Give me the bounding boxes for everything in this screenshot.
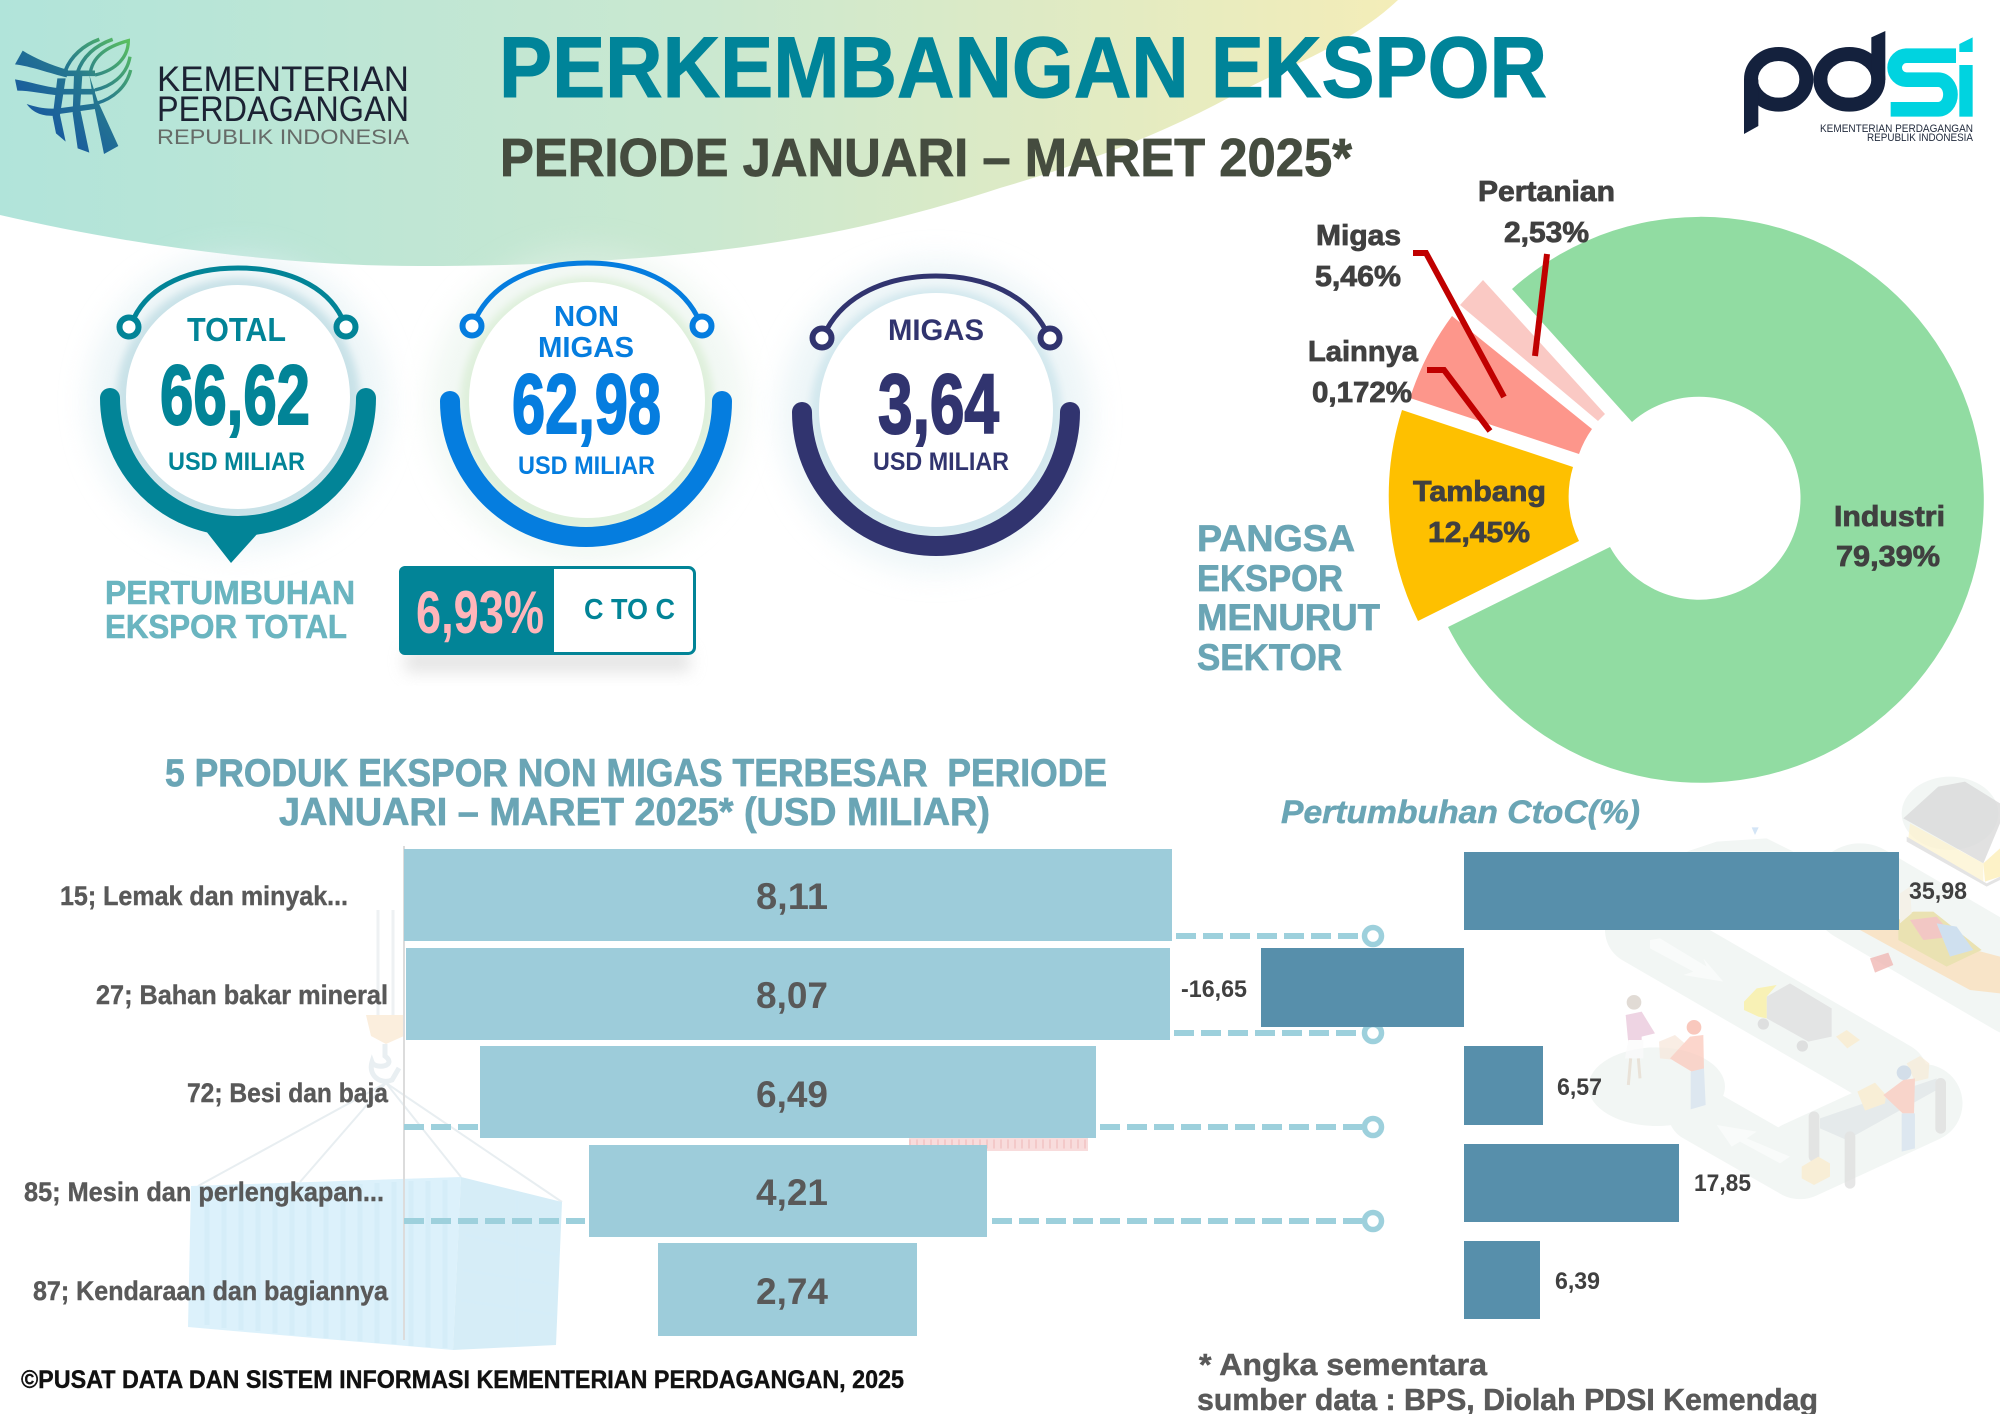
label: Industri: 79,39% bbox=[1836, 541, 1940, 573]
leader lines bbox=[1413, 253, 1547, 431]
bar: Lemak dan minyak: 8,11 bbox=[756, 876, 828, 917]
label: Industri: Industri bbox=[1834, 501, 1945, 533]
label: Industri bbox=[1834, 501, 1945, 573]
heading: pertumbuhan ekspor total: PERTUMBUHAN bbox=[105, 574, 355, 611]
slice: Tambang bbox=[1389, 410, 1579, 621]
icon: Kemendag emblem bbox=[15, 39, 131, 154]
logo wordmark: KEMENTERIAN bbox=[157, 60, 409, 99]
label: Migas bbox=[1315, 220, 1401, 293]
bar: Besi dan baja bbox=[187, 1046, 1096, 1138]
bar: Lemak dan minyak bbox=[60, 849, 1172, 941]
logo caption bbox=[1820, 123, 1974, 144]
slice: Migas bbox=[1410, 316, 1592, 454]
growth callout box bbox=[399, 566, 694, 672]
heading: pangsa ekspor: PANGSA bbox=[1197, 518, 1355, 559]
header gradient banner bbox=[0, 0, 1398, 266]
bar: Lemak dan minyak: 15; Lemak dan minyak... bbox=[60, 881, 348, 911]
gauge pointer bbox=[206, 531, 258, 563]
logo caption: REPUBLIK INDONESIA bbox=[1867, 132, 1974, 144]
unit: USD MILIAR bbox=[518, 452, 655, 480]
slice: Industri bbox=[1448, 217, 1984, 783]
label: Migas: 5,46% bbox=[1315, 261, 1401, 293]
label: Lainnya: Lainnya bbox=[1308, 336, 1419, 368]
growth value: 6,93% bbox=[416, 579, 544, 646]
footnote: source bbox=[1197, 1347, 1818, 1414]
heading: pangsa ekspor: SEKTOR bbox=[1197, 637, 1342, 678]
icon: pdsi letters bbox=[1744, 31, 1973, 134]
gauge arc bbox=[110, 398, 366, 526]
logo caption: KEMENTERIAN PERDAGANGAN bbox=[1820, 123, 1973, 135]
label: Tambang: 12,45% bbox=[1428, 517, 1530, 549]
bar: Kendaraan dan bagiannya bbox=[33, 1243, 917, 1336]
label: NON bbox=[554, 301, 619, 333]
unit: USD MILIAR bbox=[873, 448, 1009, 476]
bar: 6,39 bbox=[1464, 1241, 1600, 1319]
label: Tambang bbox=[1413, 476, 1546, 549]
label: Tambang: Tambang bbox=[1413, 476, 1546, 508]
heading: 5 produk ekspor: JANUARI – MARET 2025* (USD MILIAR) bbox=[279, 791, 990, 834]
logo: PDSI bbox=[1744, 31, 1974, 144]
heading: pangsa ekspor: EKSPOR bbox=[1197, 558, 1343, 599]
gauge arc bbox=[802, 412, 1070, 546]
label: Pertanian: Pertanian bbox=[1478, 176, 1615, 208]
heading: pangsa ekspor: MENURUT bbox=[1197, 597, 1380, 638]
value: 62,98 bbox=[512, 357, 661, 451]
footer: copyright: ©PUSAT DATA DAN SISTEM INFORMASI KEMENTERIAN PERDAGANGAN, 2025 bbox=[21, 1366, 904, 1394]
label: Pertanian: 2,53% bbox=[1504, 217, 1589, 249]
bar: 17,85: 17,85 bbox=[1694, 1170, 1751, 1197]
bar: Besi dan baja: 6,49 bbox=[756, 1074, 828, 1115]
gauge top arc bbox=[462, 263, 712, 336]
footnote: source: * Angka sementara bbox=[1199, 1347, 1488, 1382]
bar: 35,98: 35,98 bbox=[1909, 878, 1967, 905]
label: MIGAS bbox=[538, 332, 634, 364]
logo wordmark bbox=[157, 60, 409, 149]
heading: pertumbuhan ekspor total bbox=[105, 574, 355, 645]
bar: 35,98 bbox=[1464, 852, 1967, 930]
logo wordmark: REPUBLIK INDONESIA bbox=[157, 126, 409, 149]
bar: Mesin dan perlengkapan: 4,21 bbox=[756, 1172, 828, 1213]
connector lines bbox=[404, 846, 1382, 1340]
label: MIGAS bbox=[888, 314, 984, 347]
bar: 6,57 bbox=[1464, 1046, 1602, 1125]
gauge: non migas bbox=[429, 247, 745, 563]
growth basis: C TO C bbox=[584, 594, 675, 626]
label: Pertanian bbox=[1478, 176, 1615, 249]
bar: -16,65 bbox=[1181, 948, 1464, 1027]
bar: Bahan bakar mineral: 27; Bahan bakar mineral bbox=[96, 980, 388, 1010]
subtitle: PERIODE JANUARI – MARET 2025* bbox=[500, 128, 1352, 188]
logo: Kementerian Perdagangan bbox=[15, 39, 409, 154]
label: Lainnya: 0,172% bbox=[1312, 377, 1412, 409]
gauge: migas bbox=[780, 260, 1092, 572]
slice: Pertanian bbox=[1460, 280, 1605, 421]
title: PERKEMBANGAN EKSPOR bbox=[499, 20, 1547, 116]
bar: 6,57: 6,57 bbox=[1557, 1074, 1602, 1101]
gauge: total bbox=[88, 252, 388, 563]
bar: 6,39: 6,39 bbox=[1555, 1268, 1600, 1295]
donut chart: pangsa ekspor menurut sektor bbox=[1308, 176, 1984, 783]
bar: Kendaraan dan bagiannya: 2,74 bbox=[756, 1271, 828, 1312]
value: 66,62 bbox=[160, 348, 310, 442]
bar: Bahan bakar mineral: 8,07 bbox=[756, 975, 828, 1016]
bar chart: pertumbuhan CtoC bbox=[1181, 852, 1967, 1319]
heading: 5 produk ekspor bbox=[165, 752, 1107, 834]
bar: 17,85 bbox=[1464, 1144, 1751, 1222]
gauge arc bbox=[450, 401, 722, 537]
bar: Bahan bakar mineral bbox=[96, 948, 1170, 1040]
unit: USD MILIAR bbox=[168, 448, 305, 476]
heading: 5 produk ekspor: 5 PRODUK EKSPOR NON MIGAS TERBESAR PERIODE bbox=[165, 752, 1107, 795]
gauge top arc bbox=[812, 276, 1060, 348]
gauge top arc bbox=[120, 268, 356, 336]
bar: Mesin dan perlengkapan: 85; Mesin dan perlengkapan... bbox=[24, 1177, 384, 1207]
background illustration: container on crane bbox=[188, 910, 1088, 1350]
label: TOTAL bbox=[187, 311, 286, 348]
label bbox=[538, 301, 634, 364]
bar: -16,65: -16,65 bbox=[1181, 976, 1247, 1003]
background illustration: logistics bbox=[1588, 777, 2000, 1185]
heading: pertumbuhan CtoC: Pertumbuhan CtoC(%) bbox=[1281, 794, 1640, 830]
funnel bar chart: top 5 produk bbox=[24, 849, 1172, 1336]
heading: pangsa ekspor bbox=[1197, 518, 1380, 678]
bar: Besi dan baja: 72; Besi dan baja bbox=[187, 1078, 389, 1108]
bar: Mesin dan perlengkapan bbox=[24, 1145, 987, 1237]
label: Lainnya bbox=[1308, 336, 1419, 409]
heading: pertumbuhan ekspor total: EKSPOR TOTAL bbox=[105, 608, 347, 645]
bar: Kendaraan dan bagiannya: 87; Kendaraan dan bagiannya bbox=[33, 1276, 389, 1306]
label: Migas: Migas bbox=[1316, 220, 1401, 252]
value: 3,64 bbox=[878, 357, 999, 451]
logo wordmark: PERDAGANGAN bbox=[157, 90, 409, 129]
